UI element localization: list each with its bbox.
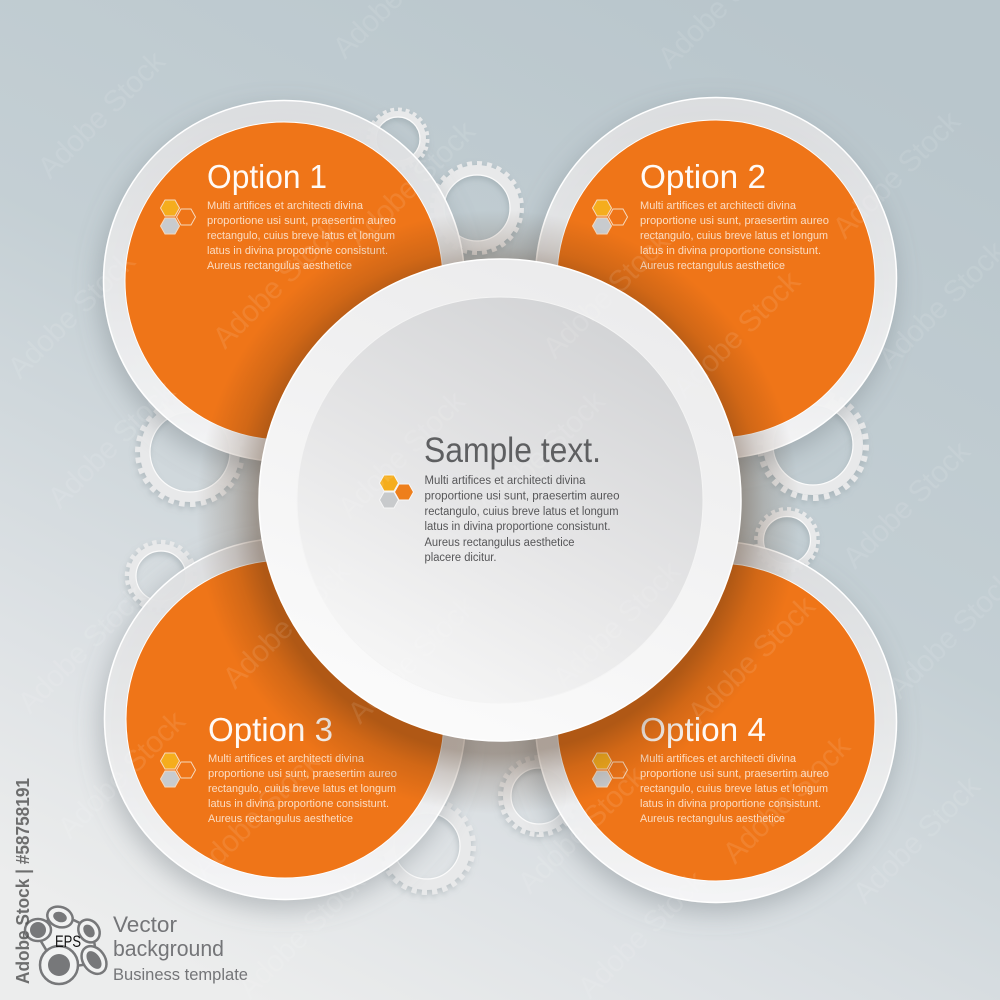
text block: option 3: proportione usi sunt, praesertim aureo [208, 768, 397, 780]
text block: option 3: Aureus rectangulus aesthetice [208, 813, 353, 825]
text block: option 2: latus in divina proportione consistunt. [640, 245, 821, 257]
text block: vector background [113, 912, 248, 984]
text block: centre: latus in divina proportione consistunt. [424, 521, 610, 533]
watermark: Adobe Stock [42, 374, 182, 515]
watermark: Adobe Stock [512, 759, 652, 900]
text block: centre: Multi artifices et architecti divina [424, 475, 586, 487]
gear: bottom left [381, 800, 473, 892]
watermark: Adobe Stock [217, 554, 357, 695]
text block: option 3 [208, 753, 397, 825]
text block: option 4: Multi artifices et architecti divina [640, 753, 797, 765]
text block: option 4: Aureus rectangulus aesthetice [640, 813, 785, 825]
icon: hexagons option 3 [160, 753, 196, 787]
text block: centre: Aureus rectangulus aesthetice [424, 537, 574, 549]
watermark: Adobe Stock [837, 434, 977, 575]
text block: option 3: rectangulo, cuius breve latus et longum [208, 783, 396, 795]
text block: centre [424, 475, 620, 564]
text block: option 4 [640, 753, 829, 825]
icon: hexagons option 1 [160, 200, 196, 234]
icon: hexagons option 2 [592, 200, 628, 234]
watermark: Adobe Stock [52, 704, 192, 845]
logo: EPS: EPS [55, 932, 81, 951]
heading: option 3: Option 3 [208, 711, 333, 748]
watermark: Adobe Stock [2, 244, 142, 385]
text block: option 1: Aureus rectangulus aesthetice [207, 260, 352, 272]
watermark: Adobe Stock [667, 264, 807, 405]
watermark: Adobe Stock [717, 729, 857, 870]
text block: option 1: rectangulo, cuius breve latus et longum [207, 230, 395, 242]
watermark: Adobe Stock [342, 589, 482, 730]
text block: vector background: Vector [113, 912, 177, 937]
text block: option 1: proportione usi sunt, praesertim aureo [207, 215, 396, 227]
text block: option 3: Multi artifices et architecti divina [208, 753, 365, 765]
stock id label: Adobe Stock | #58758191 [13, 778, 33, 984]
text block: centre: placere dicitur. [424, 552, 496, 564]
watermark: Adobe Stock [207, 214, 347, 355]
watermark: Adobe Stock [547, 554, 687, 695]
watermark: Adobe Stock [537, 224, 677, 365]
heading: option 4: Option 4 [640, 711, 766, 748]
icon: hexagons option 4 [592, 753, 628, 787]
watermark: Adobe Stock [827, 104, 967, 245]
panel: option 1 [104, 100, 464, 462]
text block: option 1 [207, 200, 396, 272]
panel: option 2 [536, 98, 896, 458]
text block: option 2: proportione usi sunt, praesertim aureo [640, 215, 829, 227]
text block: centre: rectangulo, cuius breve latus et longum [424, 506, 618, 518]
text block: option 2: rectangulo, cuius breve latus et longum [640, 230, 828, 242]
watermark: Adobe Stock [187, 744, 327, 885]
gear: top large [433, 164, 521, 252]
text block: option 1: Multi artifices et architecti divina [207, 200, 364, 212]
text block: option 2: Multi artifices et architecti divina [640, 200, 797, 212]
icon: hexagons centre [380, 475, 414, 508]
panel: option 3 [104, 538, 466, 900]
watermark: Adobe Stock [32, 44, 172, 185]
text block: option 4: latus in divina proportione consistunt. [640, 798, 821, 810]
gear: top small [368, 110, 428, 168]
text block: option 2 [640, 200, 829, 272]
text block: vector background: Business template [113, 966, 248, 984]
gear: right large [760, 392, 866, 498]
gear: left large [138, 400, 242, 504]
watermark: Adobe Stock [332, 384, 472, 525]
panel: central circle [259, 259, 741, 741]
heading: option 1: Option 1 [207, 158, 327, 195]
panel: option 4 [536, 542, 896, 902]
gear: bottom middle [500, 758, 578, 834]
watermark: Adobe Stock [342, 114, 482, 255]
watermark: Adobe Stock [847, 769, 987, 910]
text block: option 3: latus in divina proportione consistunt. [208, 798, 389, 810]
text block: vector background: background [113, 936, 224, 961]
watermark: Adobe Stock [682, 589, 822, 730]
watermark: Adobe Stock [472, 384, 612, 525]
text block: option 2: Aureus rectangulus aesthetice [640, 260, 785, 272]
heading: option 2: Option 2 [640, 158, 766, 195]
text block: option 1: latus in divina proportione consistunt. [207, 245, 388, 257]
gear: left small [127, 542, 195, 610]
text block: option 4: proportione usi sunt, praesertim aureo [640, 768, 829, 780]
watermark: Adobe Stock [12, 579, 152, 720]
text block: option 4: rectangulo, cuius breve latus et longum [640, 783, 828, 795]
text block: centre: proportione usi sunt, praesertim aureo [424, 490, 620, 502]
heading: sample text: Sample text. [424, 431, 601, 470]
gear: right small [756, 509, 818, 571]
shadow: central circle [196, 210, 800, 814]
logo: EPS [25, 903, 112, 984]
